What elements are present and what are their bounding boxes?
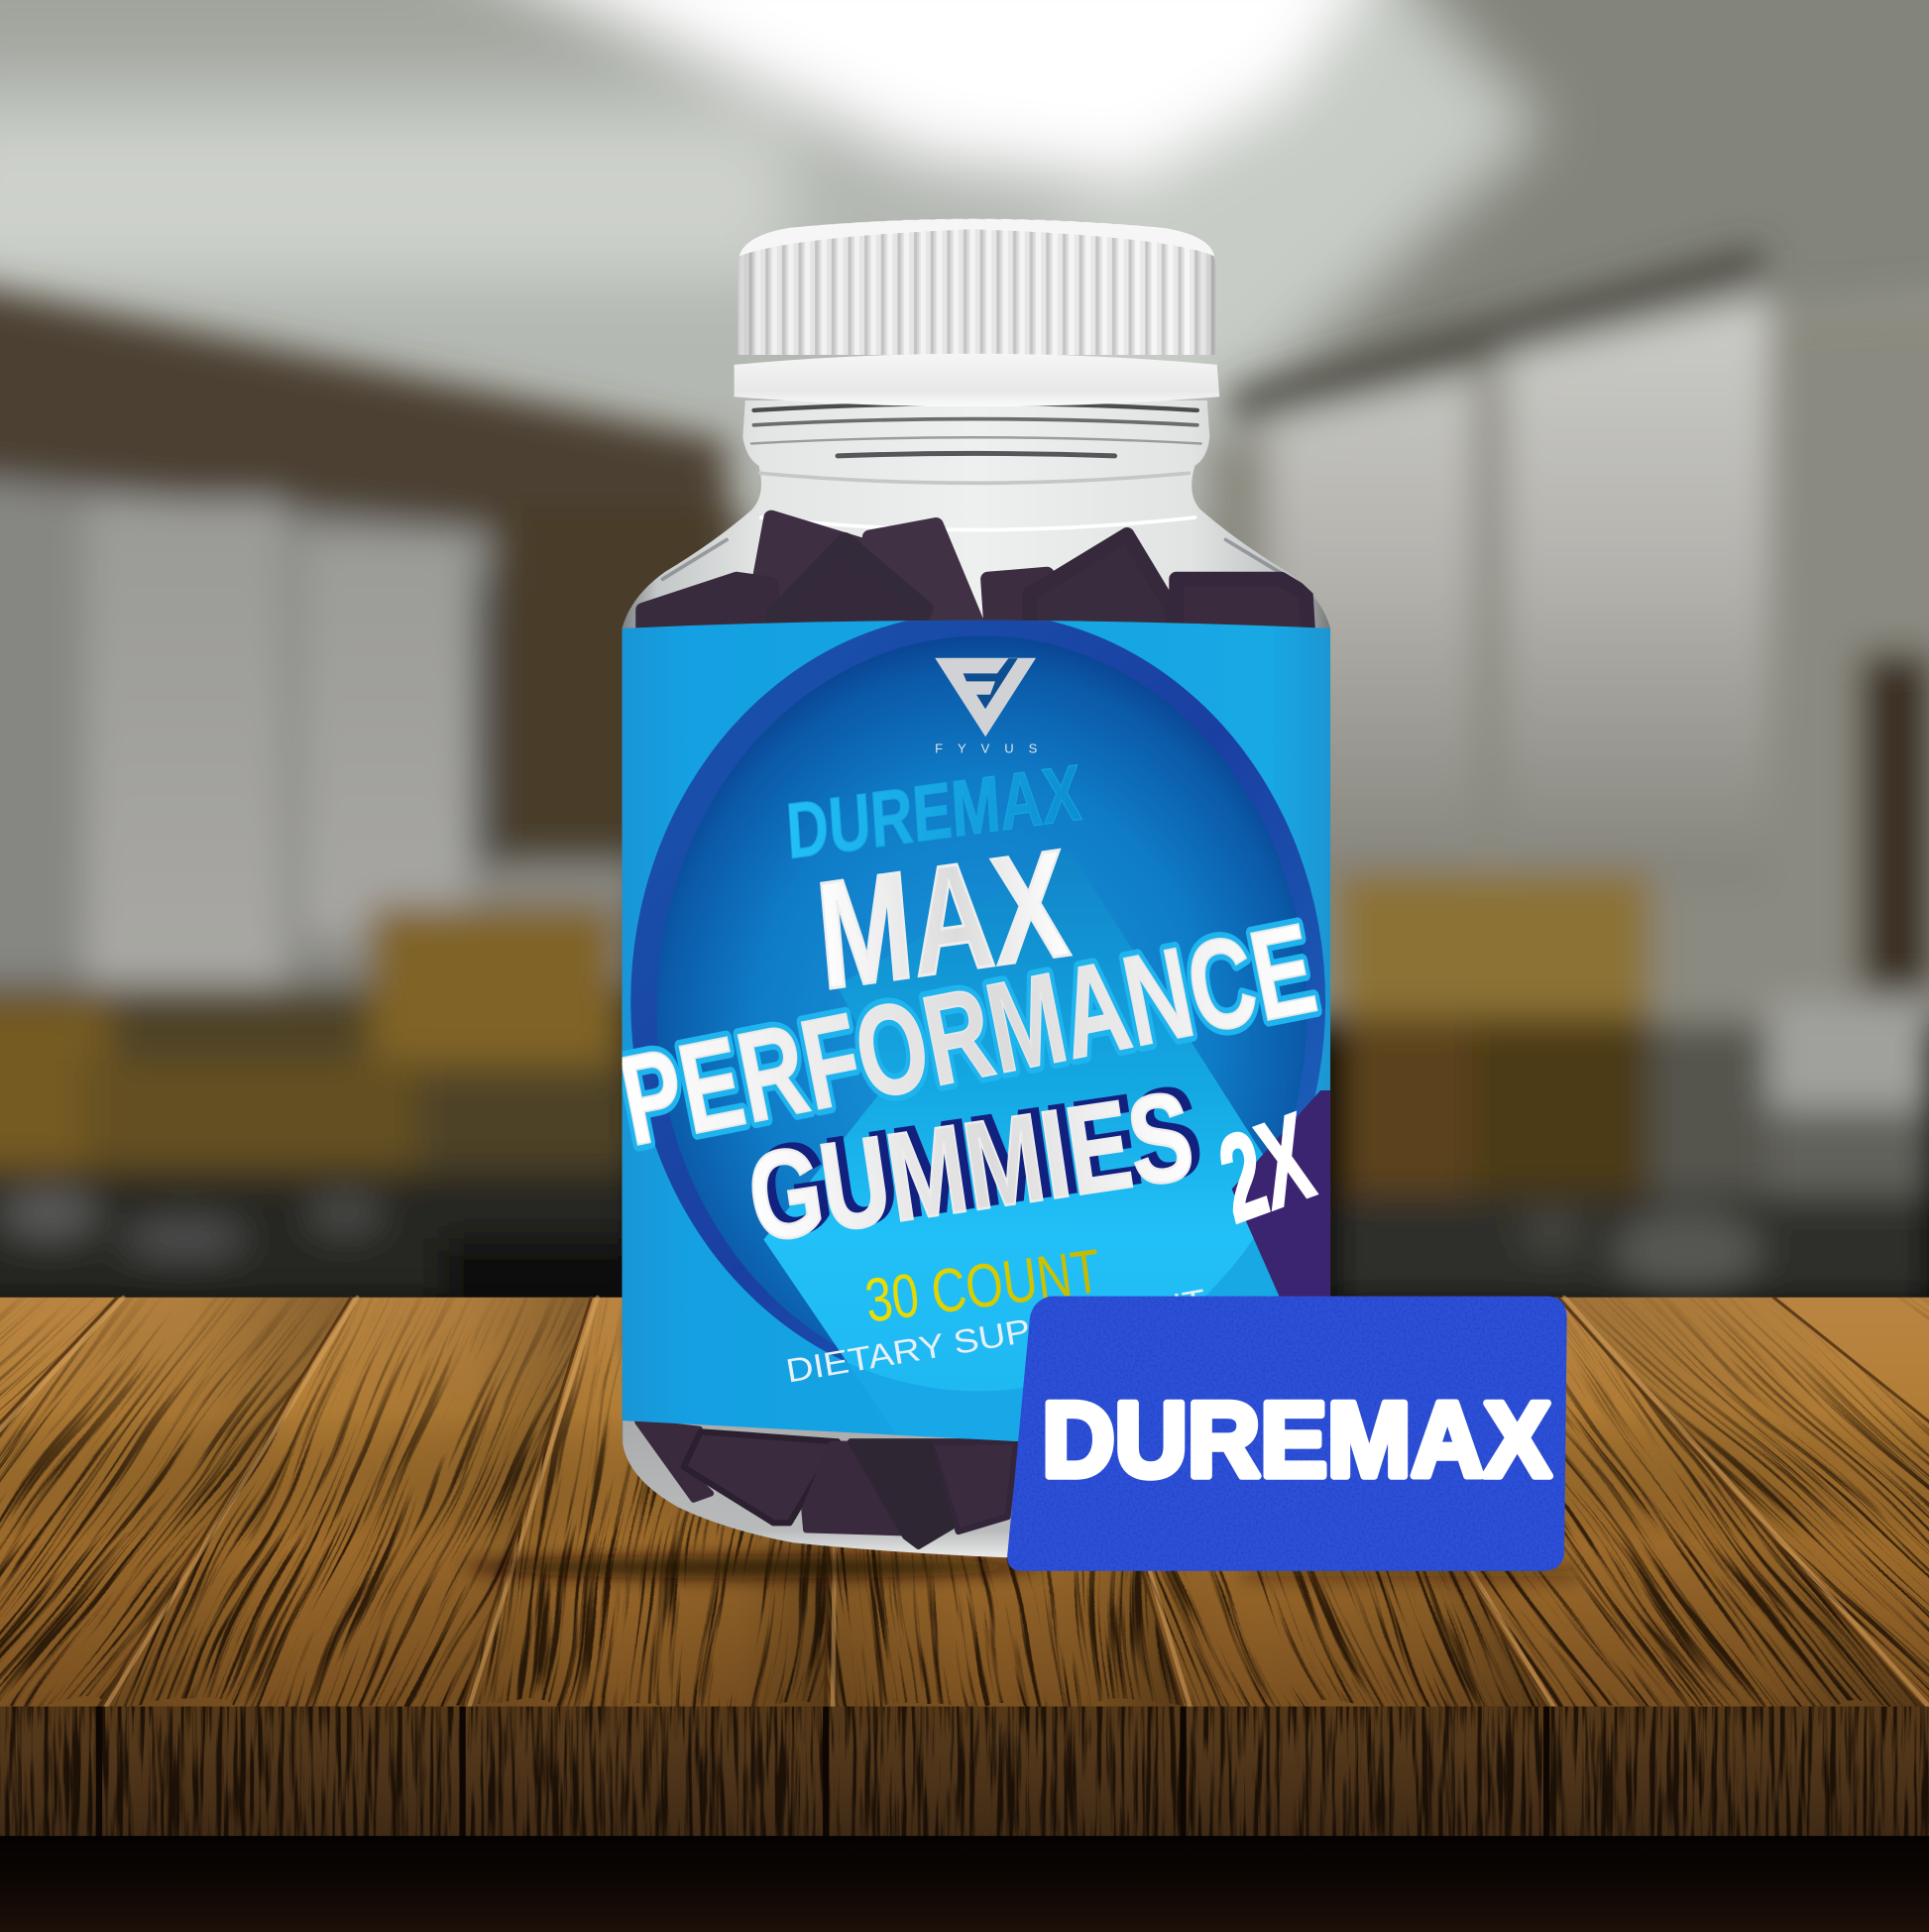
30 COUNT: 30 COUNT [861, 1237, 1104, 1336]
brand name on label: DUREMAX [784, 747, 1083, 875]
table front edge [0, 1707, 1929, 1839]
bottle shadow on table [462, 1556, 1577, 1580]
PERFORMANCE: PERFORMANCE [610, 897, 1326, 1173]
cap [735, 219, 1219, 406]
wooden table [0, 1288, 1929, 1932]
DUREMAX card [1004, 1294, 1570, 1575]
2X shadow block [1232, 1090, 1336, 1307]
room walls, windows, furniture [0, 247, 1929, 1307]
dark table underside [0, 1836, 1929, 1932]
neck reflections [663, 403, 1291, 579]
glass jar base [623, 1417, 1232, 1558]
GUMMIES: GUMMIES [739, 1064, 1201, 1269]
PERFORMANCE [610, 897, 1326, 1173]
glass jar [623, 400, 1330, 1444]
MAX: MAX [811, 816, 1075, 1022]
brand logo [935, 658, 1038, 755]
DUREMAX card: DUREMAX [1042, 1380, 1551, 1499]
label disc [630, 613, 1325, 1391]
table top planks [0, 1288, 1929, 1707]
2X: 2X [1207, 1086, 1324, 1249]
bottle [610, 219, 1342, 1558]
dietary supplement: DIETARY SUPPLEMENT [783, 1284, 1208, 1391]
long text shadow, inside disc [763, 897, 1263, 1392]
brand logo: FYVUS [935, 740, 1038, 755]
long text shadow, outside disc [763, 1239, 1211, 1441]
gummies, lower [637, 1421, 1016, 1546]
label [610, 604, 1342, 1466]
gummies, upper [643, 517, 1308, 634]
background: blurred interior room [0, 0, 1929, 1307]
GUMMIES: GUMMIES [747, 1059, 1208, 1264]
ceiling [0, 0, 1929, 567]
PERFORMANCE: PERFORMANCE [610, 897, 1326, 1173]
